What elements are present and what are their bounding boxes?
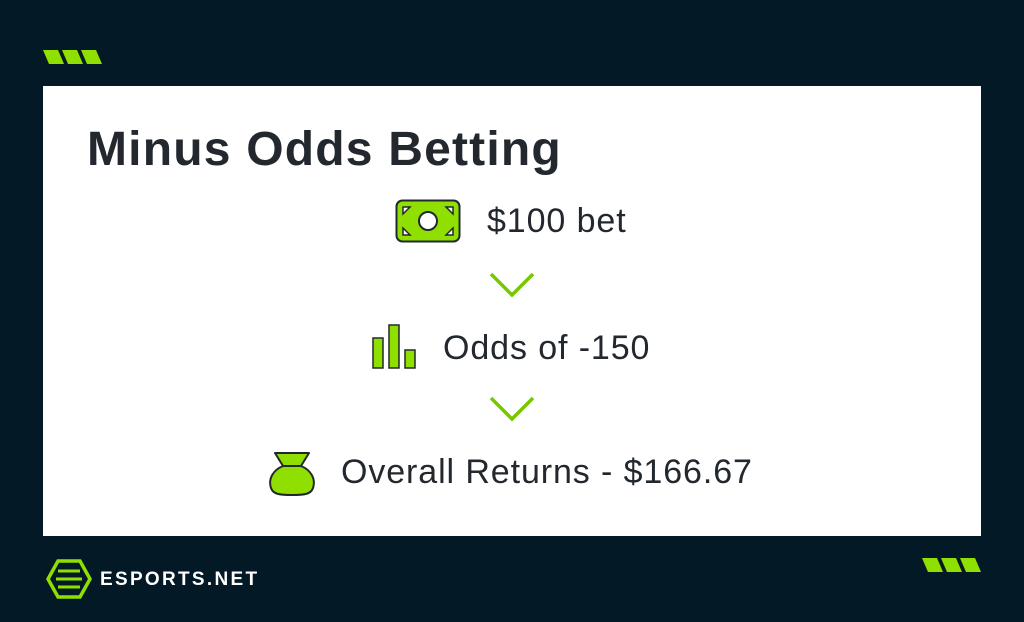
arrow: chevron 2 xyxy=(490,396,534,422)
icon: hexagon logo xyxy=(46,559,92,599)
icon: money bag xyxy=(269,452,315,496)
text: brand: ESPORTS.NET xyxy=(100,569,259,590)
arrow: chevron 1 xyxy=(490,272,534,298)
logo: esports.net xyxy=(46,559,259,599)
text: Overall Returns: Overall Returns - $166.67 xyxy=(341,453,753,491)
text: $100 bet: $100 bet xyxy=(487,202,627,240)
text: Odds of -150: Odds of -150 xyxy=(443,329,650,367)
decoration: top stripes xyxy=(43,50,102,64)
icon: money bill xyxy=(396,200,460,242)
panel: main white card xyxy=(43,86,981,536)
decoration: bottom stripes xyxy=(922,558,981,572)
title: Minus Odds Betting xyxy=(87,123,562,176)
icon: bar chart xyxy=(372,324,416,369)
